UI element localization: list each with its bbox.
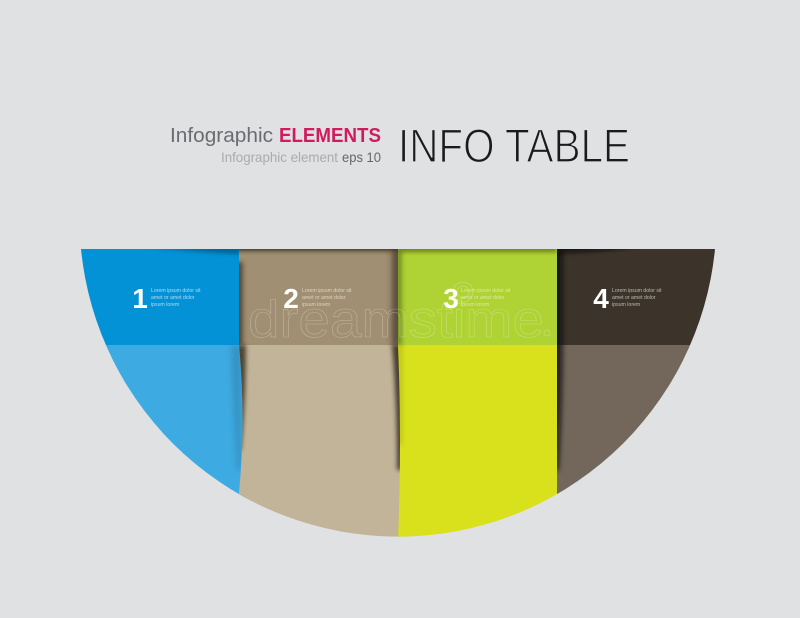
item 3 — [443, 283, 511, 314]
title block — [170, 119, 630, 172]
text 1: Lorem ipsum dolor sit — [151, 288, 201, 294]
main title: INFO TABLE — [398, 119, 630, 172]
infographic canvas — [81, 127, 715, 537]
panel: column 2 tan — [239, 249, 404, 537]
panel: column 1 blue — [81, 249, 251, 501]
item 4 — [593, 283, 662, 314]
subheading: infographic element: Infographic element — [221, 149, 338, 165]
item 2 — [283, 283, 352, 314]
text 1: amet or amet dolor — [151, 295, 195, 301]
panel: column 4 dark — [557, 249, 715, 494]
text 4: amet or amet dolor — [612, 295, 656, 301]
number 2: 2 — [283, 283, 299, 314]
number 3: 3 — [443, 283, 459, 314]
watermark registered mark — [544, 330, 550, 336]
text 2: amet or amet dolor — [302, 295, 346, 301]
text 4: ipsum lorem — [612, 302, 640, 308]
item 1 — [132, 283, 201, 314]
number 4: 4 — [593, 283, 609, 314]
watermark word: dreamstime — [248, 291, 544, 349]
heading: infographic: Infographic — [170, 125, 273, 147]
text 3: amet or amet dolor — [461, 295, 505, 301]
number 1: 1 — [132, 283, 148, 314]
watermark logo rings — [453, 282, 473, 302]
subheading: eps 10: eps 10 — [342, 149, 381, 165]
panel: column 3 green — [396, 246, 557, 545]
text 2: ipsum lorem — [302, 302, 330, 308]
text 1: ipsum lorem — [151, 302, 179, 308]
text 3: Lorem ipsum dolor sit — [461, 288, 511, 294]
text 4: Lorem ipsum dolor sit — [612, 288, 662, 294]
watermark — [248, 282, 550, 349]
text 2: Lorem ipsum dolor sit — [302, 288, 352, 294]
text 3: ipsum lorem — [461, 302, 489, 308]
heading: elements: ELEMENTS — [279, 125, 381, 147]
half-circle table — [81, 245, 717, 545]
